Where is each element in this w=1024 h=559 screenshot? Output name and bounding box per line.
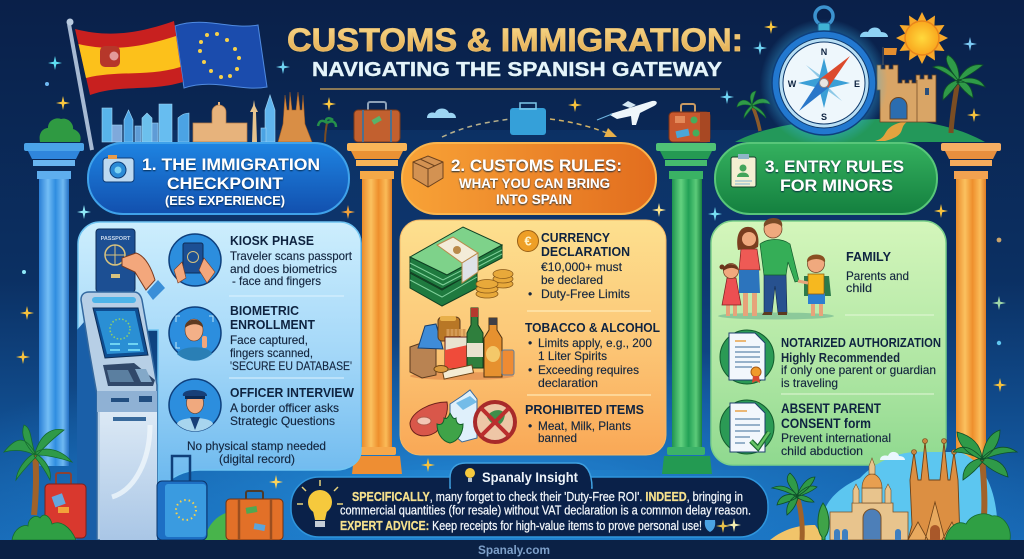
prohibited items text: Meat, Milk, Plants: [538, 419, 631, 433]
tobacco and alcohol text: Limits apply, e.g., 200: [538, 336, 652, 350]
heading text: 3. ENTRY RULES: [765, 157, 904, 176]
pillar 2: orange: [347, 143, 407, 474]
notarized authorization text: is traveling: [781, 376, 838, 390]
officer interview text: Strategic Questions: [230, 414, 335, 428]
prohibited items text: [525, 402, 644, 445]
Sagrada Familia: [908, 438, 960, 540]
skyline illustration: [102, 92, 336, 142]
tobacco and alcohol text: [525, 320, 660, 390]
currency declaration text: •: [528, 287, 532, 301]
illustration: family: [718, 218, 834, 320]
officer interview text: OFFICER INTERVIEW: [230, 385, 355, 400]
hill: [735, 119, 985, 142]
icon: red suitcase: [45, 473, 86, 538]
icon: cloud: [860, 28, 888, 37]
tobacco and alcohol text: •: [528, 363, 532, 377]
prohibited items text: PROHIBITED ITEMS: [525, 402, 644, 417]
absent parent consent text: CONSENT form: [781, 416, 871, 431]
palm: [933, 55, 985, 133]
prohibited items text: banned: [538, 431, 577, 445]
small palm: [737, 91, 770, 131]
title: [287, 22, 743, 89]
icon: officer circle: [169, 379, 221, 431]
heading text: 2. CUSTOMS RULES:: [451, 156, 622, 175]
illustration: palm, plants and luggage, bottom left: [4, 425, 283, 540]
icon: orange suitcase: [226, 491, 283, 540]
icon: prohibited items: [410, 390, 515, 443]
castle: [877, 47, 936, 122]
notarized authorization text: Highly Recommended: [781, 351, 900, 365]
insight text: commercial quantities (for resale) without VAT declaration is a common delay reason.: [340, 504, 751, 518]
bush right: [945, 514, 1010, 540]
icon: compass: N: [821, 47, 827, 57]
currency declaration text: be declared: [541, 273, 603, 287]
heading text: CHECKPOINT: [167, 174, 284, 193]
notarized authorization text: [781, 335, 941, 390]
pillar 1: blue: [24, 118, 84, 466]
heading text: INTO SPAIN: [496, 192, 572, 207]
heading text: WHAT YOU CAN BRING: [459, 176, 610, 191]
icon: suitcase on orange pillar: [354, 102, 400, 142]
heading text: [451, 156, 622, 207]
title: CUSTOMS & IMMIGRATION:: [287, 22, 743, 58]
biometric enrollment text: ENROLLMENT: [230, 317, 315, 332]
green mound: [205, 512, 240, 540]
icon: euro coin: [518, 230, 538, 252]
heading text: FOR MINORS: [780, 176, 893, 195]
icon: consent document: [720, 400, 774, 454]
sand: [770, 525, 825, 540]
insight text: [340, 490, 751, 533]
heading text: 1. THE IMMIGRATION: [142, 155, 320, 174]
panel: customs header pill: [402, 143, 656, 214]
tobacco and alcohol text: Exceeding requires: [538, 363, 639, 377]
icon: kiosk: [77, 292, 157, 540]
heading text: (EES EXPERIENCE): [165, 193, 285, 208]
palm: [4, 425, 72, 515]
kiosk phase text: - face and fingers: [232, 274, 321, 288]
icon: passport and hand: [96, 229, 165, 300]
panel: customs rules: [400, 220, 666, 455]
icon: passport scan circle: [169, 234, 221, 286]
insight box: [291, 477, 768, 537]
icon: travel path with blue case and plane: [427, 101, 657, 137]
insight text: SPECIFICALLY, many forget to check their 'Duty-Free ROI'. INDEED, bringing in: [352, 490, 743, 504]
biometric enrollment text: Face captured,: [230, 333, 308, 347]
icon: notarized document: [720, 330, 774, 384]
notarized authorization text: NOTARIZED AUTHORIZATION: [781, 335, 941, 350]
icon: ID clipboard: [731, 154, 756, 187]
absent parent consent text: Prevent international: [781, 431, 891, 445]
callout: Spanaly Insight: [291, 463, 768, 537]
pillar 4: orange: [941, 143, 1001, 466]
icon: compass: [760, 7, 888, 147]
heading text: [142, 155, 320, 208]
boy: [798, 254, 831, 316]
panel: immigration checkpoint: [77, 222, 361, 540]
icon: flagpole with Spanish and EU flags: [66, 18, 267, 150]
family text: Parents and: [846, 269, 909, 283]
family text: child: [846, 281, 872, 295]
icon: compass: S: [821, 112, 827, 122]
family text: FAMILY: [846, 249, 891, 264]
currency declaration text: Duty-Free Limits: [541, 287, 630, 301]
tobacco and alcohol text: TOBACCO & ALCOHOL: [525, 320, 660, 335]
illustration: hill, castle, sun and palms: [735, 12, 985, 142]
biometric enrollment text: fingers scanned,: [230, 346, 313, 360]
digital record note: [187, 439, 326, 466]
currency declaration text: [528, 230, 630, 301]
insight text: EXPERT ADVICE: Keep receipts for high-value items to prove personal use!: [340, 519, 702, 533]
kiosk phase text: and does biometrics: [230, 262, 337, 276]
panel: entry rules for minors: [711, 218, 946, 465]
insight tab: Spanaly Insight: [482, 469, 578, 485]
icon: light bulb: [297, 480, 343, 527]
notarized authorization text: if only one parent or guardian: [781, 363, 936, 377]
girl: [720, 264, 741, 316]
footer band: Spanaly.com: [478, 543, 550, 557]
absent parent consent text: [781, 401, 891, 458]
digital record note: No physical stamp needed: [187, 439, 326, 453]
biometric enrollment text: BIOMETRIC: [230, 303, 300, 318]
officer interview text: [230, 385, 355, 428]
title: NAVIGATING THE SPANISH GATEWAY: [312, 58, 722, 81]
icon: shield and sparkles: [705, 518, 741, 533]
family text: [846, 249, 909, 295]
kiosk phase text: KIOSK PHASE: [230, 233, 314, 248]
icon: tobacco and alcohol goods: [410, 308, 514, 380]
icon: cardboard box: [413, 156, 443, 187]
currency declaration text: DECLARATION: [541, 244, 630, 259]
officer interview text: A border officer asks: [230, 401, 339, 415]
icon: cash stack: [410, 227, 513, 306]
small tree: [818, 503, 829, 540]
icon: euro coin: €: [524, 234, 532, 248]
icon: blue suitcase: [157, 456, 207, 540]
prohibited items text: •: [528, 419, 532, 433]
icon: camera: [103, 155, 134, 182]
palm: [772, 473, 817, 540]
palm right: [953, 430, 1017, 516]
icon: suitcase on green pillar: [669, 104, 710, 142]
panel: minors header pill: [715, 143, 937, 214]
kiosk phase text: Traveler scans passport: [230, 249, 353, 263]
mother: [737, 227, 760, 316]
icon: passport and hand: PASSPORT: [101, 236, 131, 242]
icon: sun: [896, 12, 948, 64]
icon: compass: E: [854, 79, 860, 89]
biometric enrollment text: [230, 303, 352, 373]
currency declaration text: €10,000+ must: [541, 260, 623, 274]
father: [760, 218, 799, 315]
absent parent consent text: child abduction: [781, 444, 863, 458]
kiosk phase text: [230, 233, 353, 288]
pillar 3: green: [656, 143, 716, 474]
biometric enrollment text: 'SECURE EU DATABASE': [230, 359, 352, 373]
bush: [12, 515, 76, 540]
tobacco and alcohol text: declaration: [538, 376, 598, 390]
heading text: [765, 157, 904, 195]
currency declaration text: CURRENCY: [541, 230, 610, 245]
sky cloud: [820, 452, 997, 540]
cathedral: [830, 458, 908, 540]
footer band: [0, 540, 1024, 559]
illustration: Barcelona landmarks with palms, bottom right: [770, 430, 1017, 540]
icon: face scan circle: [169, 307, 221, 361]
absent parent consent text: ABSENT PARENT: [781, 401, 882, 416]
tobacco and alcohol text: •: [528, 336, 532, 350]
tobacco and alcohol text: 1 Liter Spirits: [538, 349, 607, 363]
icon: compass: W: [788, 79, 797, 89]
insight tab: [450, 463, 592, 490]
digital record note: (digital record): [219, 452, 295, 466]
panel: immigration header pill: [88, 143, 349, 214]
